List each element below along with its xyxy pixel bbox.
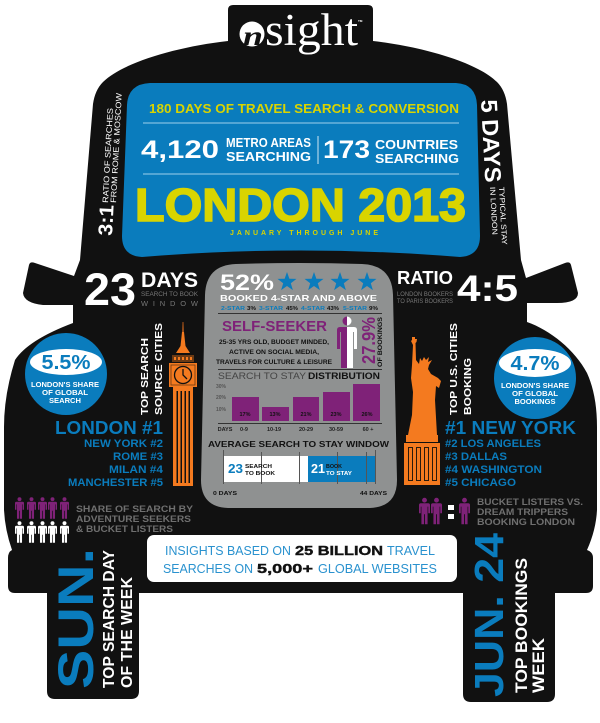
bucket listers text: DREAM TRIPPERS	[477, 507, 568, 517]
metro areas stat: 4,120	[141, 136, 219, 164]
distribution bar chart: DAYS	[218, 427, 233, 433]
3:1 ratio stat	[95, 92, 124, 236]
insights callout: INSIGHTS BASED ON	[165, 544, 291, 558]
distribution bar chart: 17%	[239, 412, 251, 418]
metro areas stat: SEARCHING	[226, 150, 311, 164]
23 days stat: SEARCH TO BOOK	[141, 291, 199, 298]
star breakdown: 2-STAR	[221, 306, 245, 312]
top search source cities label	[139, 323, 165, 415]
search to stay window bar: 0 DAYS	[213, 491, 237, 497]
distribution bar chart: 23%	[330, 412, 342, 418]
ratio 4:5 stat	[397, 268, 518, 309]
search to stay window bar: BOOK	[326, 464, 343, 470]
top us cities label: TOP U.S. CITIES	[448, 323, 460, 415]
self-seeker description: ACTIVE ON SOCIAL MEDIA,	[229, 349, 319, 356]
distribution bar chart: 10%	[216, 407, 227, 413]
countries stat: SEARCHING	[375, 152, 459, 166]
windshield heading: 180 DAYS OF TRAVEL SEARCH & CONVERSION	[149, 101, 459, 116]
5 days stat: 5 DAYS	[476, 99, 506, 183]
us cities list: #5 CHICAGO	[445, 477, 516, 489]
self-seeker heading: SELF-SEEKER	[222, 319, 328, 335]
self-seeker description: 25-35 YRS OLD, BUDGET MINDED,	[219, 339, 329, 346]
star breakdown: 45%	[286, 306, 298, 312]
person icon half purple half white	[337, 316, 357, 368]
countries stat: 173	[323, 136, 370, 164]
search to stay window bar: TO STAY	[326, 471, 352, 477]
distribution bar chart: 30-59	[329, 427, 343, 433]
bucket listers ratio icons	[419, 498, 470, 524]
global search share badge: 5.5%	[42, 352, 91, 374]
main title: LONDON 2013	[135, 179, 466, 231]
23 days stat: 23	[84, 264, 136, 315]
3:1 ratio stat: 3:1	[95, 204, 119, 236]
global bookings share badge: OF GLOBAL	[512, 391, 559, 398]
search to stay window bar: 44 DAYS	[360, 491, 387, 497]
insights callout: 5,000+	[257, 561, 314, 576]
distribution bar chart: 20%	[216, 395, 227, 401]
star breakdown: 9%	[369, 306, 378, 312]
insights callout	[147, 535, 457, 582]
source cities list: MANCHESTER #5	[68, 477, 163, 489]
insights callout: TRAVEL	[387, 544, 435, 558]
top us cities label	[448, 323, 474, 415]
metro areas stat	[141, 136, 311, 164]
search to stay window bar: 23	[228, 461, 243, 476]
bucket listers text: BOOKING LONDON	[477, 517, 575, 527]
5 days stat: TYPICAL STAY	[497, 187, 509, 245]
self-seeker description	[216, 339, 332, 366]
us cities list: #1 NEW YORK	[445, 418, 576, 438]
windshield panel	[122, 83, 480, 257]
source cities list: NEW YORK #2	[84, 438, 163, 450]
june 24 stat: TOP BOOKINGS	[512, 558, 531, 693]
star breakdown: 4-STAR	[301, 306, 325, 312]
share of search text: SHARE OF SEARCH BY	[76, 504, 193, 514]
self-seeker description: TRAVELS FOR CULTURE & LEISURE	[216, 359, 332, 366]
3:1 ratio stat: FROM ROME & MOSCOW	[109, 92, 124, 203]
countries stat	[323, 136, 459, 166]
share of search people icons	[15, 497, 69, 543]
global bookings share badge	[494, 337, 576, 419]
global bookings share badge: LONDON'S SHARE	[501, 383, 569, 390]
insights callout: GLOBAL WEBSITES	[318, 562, 437, 576]
global search share badge: OF GLOBAL	[42, 390, 89, 397]
5 days stat: IN LONDON	[488, 187, 500, 235]
logo: n	[243, 21, 263, 51]
distribution bar chart: 60 +	[363, 427, 373, 433]
sunday stat: OF THE WEEK	[119, 576, 136, 688]
global bookings share badge: 4.7%	[510, 353, 560, 375]
ratio 4:5 stat: RATIO	[397, 268, 453, 288]
star breakdown: 5-STAR	[343, 306, 367, 312]
source cities list: ROME #3	[113, 451, 163, 463]
52 percent stat: 52%	[220, 270, 274, 295]
logo: TM	[358, 19, 363, 23]
bucket listers text	[477, 497, 583, 527]
share of search text: ADVENTURE SEEKERS	[76, 514, 191, 524]
distribution bar chart: 26%	[361, 412, 373, 418]
icon: big ben	[169, 322, 197, 486]
distribution bar chart: 0-9	[240, 427, 248, 433]
bucket listers text: BUCKET LISTERS VS.	[477, 497, 583, 507]
distribution bar chart	[216, 384, 382, 433]
date subtitle: JANUARY THROUGH JUNE	[230, 230, 378, 237]
distribution heading: DISTRIBUTION	[308, 371, 380, 381]
distribution bar chart: 10-19	[267, 427, 281, 433]
insights callout: SEARCHES ON	[163, 562, 253, 576]
star rating icons	[277, 272, 377, 290]
average window heading: AVERAGE SEARCH TO STAY WINDOW	[208, 439, 390, 449]
23 days stat: DAYS	[141, 269, 198, 292]
us cities list: #4 WASHINGTON	[445, 464, 542, 476]
ratio 4:5 stat: LONDON BOOKERS	[397, 292, 453, 298]
top search source cities label: TOP SEARCH	[139, 338, 151, 415]
us cities list: #2 LOS ANGELES	[445, 438, 541, 450]
source cities list: LONDON #1	[55, 418, 163, 438]
distribution bar chart: 20-29	[299, 427, 313, 433]
sunday stat: SUN.	[48, 548, 104, 689]
bookings share: OF BOOKINGS	[377, 316, 384, 367]
bookings share: 27.9%	[359, 317, 379, 364]
june 24 stat: JUN. 24	[466, 533, 512, 697]
distribution heading	[218, 371, 380, 381]
us cities list	[445, 418, 576, 489]
share of search text	[76, 504, 193, 534]
global bookings share badge: BOOKINGS	[514, 399, 556, 406]
distribution bar chart: 30%	[216, 384, 227, 390]
5 days stat	[476, 99, 509, 245]
insights callout: 25 BILLION	[295, 543, 383, 558]
star breakdown: 43%	[327, 306, 339, 312]
booked label: BOOKED 4-STAR AND ABOVE	[220, 293, 377, 303]
star breakdown: 3-STAR	[259, 306, 283, 312]
ratio 4:5 stat: 4:5	[457, 268, 518, 309]
distribution bar chart: 13%	[269, 412, 281, 418]
share of search text: & BUCKET LISTERS	[76, 524, 173, 534]
june 24 stat: WEEK	[529, 637, 548, 693]
global search share badge	[25, 333, 107, 415]
top search source cities label: SOURCE CITIES	[153, 323, 165, 415]
metro areas stat: METRO AREAS	[226, 136, 311, 150]
distribution heading: SEARCH TO STAY	[218, 371, 306, 381]
23 days stat	[84, 264, 199, 315]
star breakdown: 3%	[247, 306, 256, 312]
search to stay window bar: SEARCH	[245, 464, 272, 470]
source cities list	[55, 418, 164, 489]
global search share badge: SEARCH	[49, 398, 81, 405]
sunday stat: TOP SEARCH DAY	[101, 549, 118, 688]
logo: sight	[265, 5, 359, 55]
search to stay window bar	[213, 450, 387, 497]
center grey panel	[201, 263, 397, 508]
ratio 4:5 stat: TO PARIS BOOKERS	[397, 299, 453, 305]
search to stay window bar: TO BOOK	[245, 471, 276, 477]
23 days stat: WINDOW	[141, 299, 199, 308]
june 24 stat	[466, 533, 548, 697]
distribution bar chart: 21%	[300, 412, 312, 418]
search to stay window bar: 21	[311, 461, 325, 476]
top us cities label: BOOKING	[462, 358, 474, 415]
star breakdown	[221, 306, 378, 312]
sunday stat	[48, 548, 136, 689]
global search share badge: LONDON'S SHARE	[31, 382, 99, 389]
3:1 ratio stat: RATIO OF SEARCHES	[101, 108, 115, 203]
countries stat: COUNTRIES	[375, 138, 458, 152]
icon: statue of liberty	[404, 337, 441, 485]
us cities list: #3 DALLAS	[445, 451, 507, 463]
source cities list: MILAN #4	[109, 464, 164, 476]
